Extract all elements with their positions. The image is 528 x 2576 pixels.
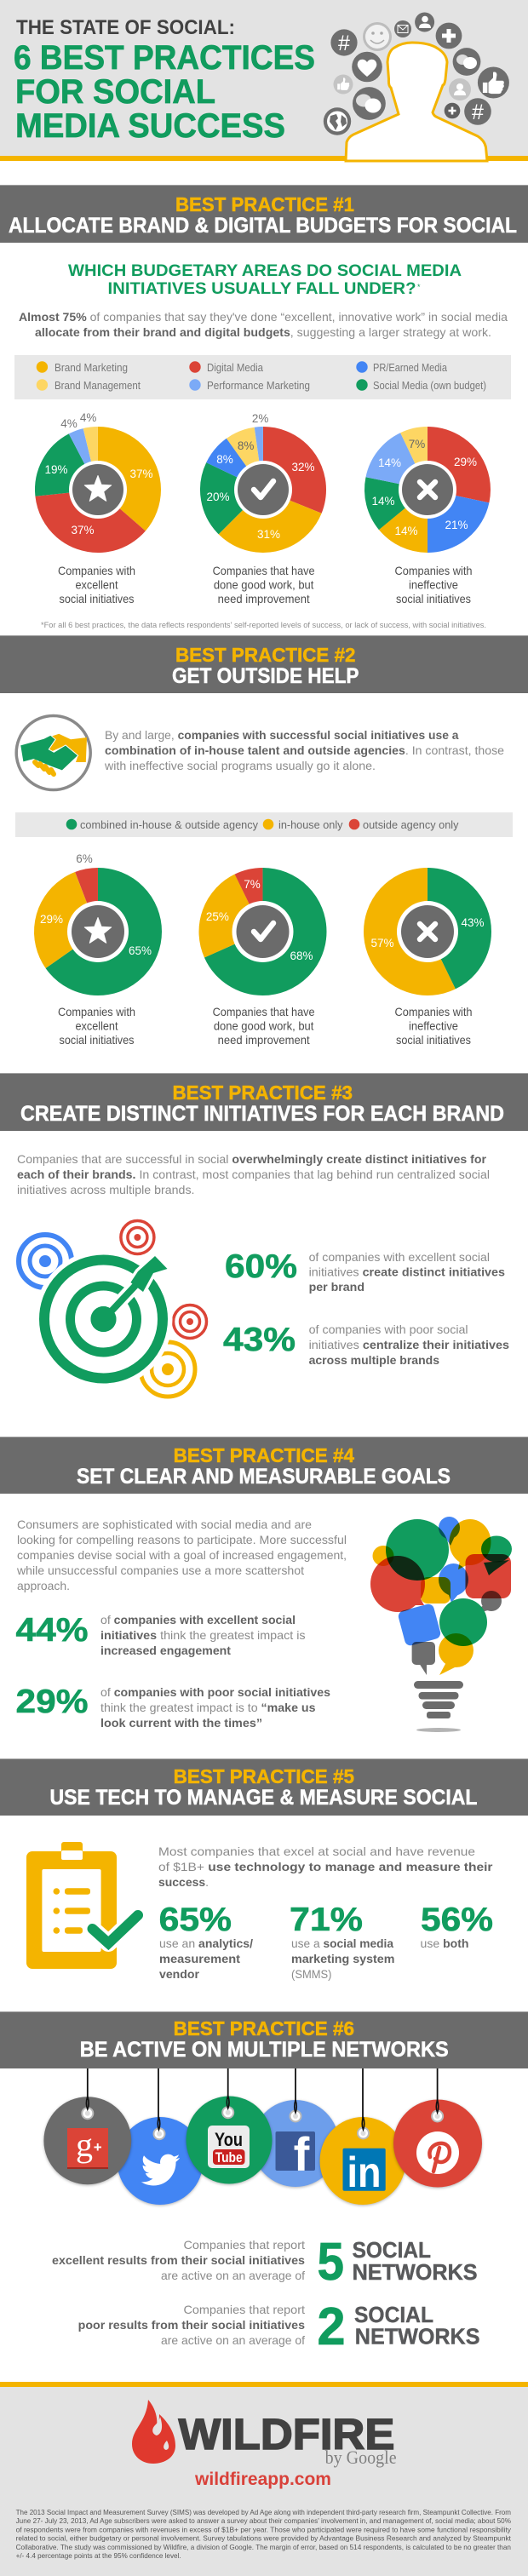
intro text: allocate from their brand and digital budgets, suggesting a larger strategy at work. — [35, 325, 491, 339]
stat: 44 percent: of companies with excellent social — [100, 1613, 296, 1626]
tag: google plus — [43, 2068, 131, 2184]
captions: agency pies: done good work, but — [214, 1018, 313, 1032]
icon: hash: # — [338, 32, 350, 55]
icon: light bulb of speech bubbles — [370, 1517, 512, 1732]
icon: handshake — [16, 715, 90, 790]
heading bar: best practice 5: BEST PRACTICE #5 — [174, 1765, 354, 1787]
pie chart: good work, budgets — [206, 412, 315, 541]
pie chart: ineffective, budgets: 7% — [409, 438, 425, 450]
intro text: outside help: By and large, companies with successful social initiatives use a — [105, 728, 459, 742]
tag: linkedin — [320, 2068, 405, 2205]
legend: budget areas: Digital Media — [207, 361, 264, 374]
methodology fine print: +/- 4.4 percentage points at the 95% confidence level. — [16, 2551, 181, 2560]
hanging tags: social networks — [43, 2068, 482, 2205]
icon: cross — [420, 482, 435, 497]
heading bar: best practice 4: SET CLEAR AND MEASURABLE GOALS — [77, 1465, 451, 1489]
pie chart: excellent, agency: 6% — [76, 852, 93, 865]
stat: 65 percent: measurement — [159, 1952, 240, 1965]
intro text: distinct initiatives: Companies that are successful in social overwhelmingly create distinct initiatives for — [17, 1152, 487, 1166]
stat: 2 social networks: NETWORKS — [355, 2323, 480, 2349]
pie chart: good work, budgets: 20% — [206, 491, 230, 503]
captions: budget pies — [58, 564, 472, 605]
pie chart: good work, agency: 25% — [206, 910, 229, 923]
captions: budget pies: Companies that have — [213, 564, 315, 577]
icon: person silhouette — [346, 43, 487, 161]
heading bar: best practice 4: BEST PRACTICE #4 — [174, 1444, 354, 1466]
captions: budget pies: social initiatives — [396, 592, 471, 605]
stat: 65 percent: 65% — [159, 1902, 232, 1938]
heading bar: best practice 1 — [0, 185, 528, 243]
stat: 43 percent: 43% — [223, 1322, 296, 1358]
pie chart: ineffective, budgets — [371, 438, 477, 537]
stat: 2 social networks: SOCIAL — [354, 2302, 433, 2327]
stat: 5 social networks — [52, 2233, 478, 2292]
pie chart: good work, budgets: 2% — [252, 412, 268, 425]
icon: star — [84, 918, 112, 943]
legend: agency: outside agency only — [363, 818, 459, 831]
heading bar: best practice 3 — [0, 1073, 528, 1131]
stat: 60 percent — [225, 1248, 505, 1294]
stat: 5 social networks: SOCIAL — [353, 2237, 431, 2263]
icon: plus — [436, 23, 462, 49]
stat: 60 percent: initiatives create distinct initiatives — [309, 1265, 505, 1279]
stat: 56 percent: 56% — [421, 1902, 493, 1938]
stat: 2 social networks: Companies that report — [184, 2303, 305, 2316]
pie chart: good work, budgets: 8% — [238, 439, 254, 452]
pie chart: excellent, budgets: 4% — [80, 411, 96, 424]
pie chart: excellent, budgets: 19% — [44, 463, 68, 476]
icon: star — [84, 475, 112, 501]
tag: twitter — [117, 2068, 204, 2205]
legend: budget areas: Social Media (own budget) — [373, 379, 486, 392]
captions: agency pies: excellent — [75, 1018, 118, 1032]
intro text: technology — [158, 1845, 493, 1889]
captions: budget pies: Companies with — [58, 564, 135, 577]
pie chart: excellent, budgets: 37% — [71, 524, 95, 536]
icon: check — [254, 481, 273, 497]
legend: budget areas — [14, 355, 511, 399]
stat: 43 percent: of companies with poor social — [309, 1322, 468, 1336]
captions: budget pies: excellent — [75, 577, 118, 591]
legend: budget areas: Brand Management — [55, 379, 141, 392]
stat: 44 percent: increased engagement — [100, 1644, 231, 1657]
heading bar: best practice 6: BE ACTIVE ON MULTIPLE NETWORKS — [80, 2038, 449, 2062]
intro text: goals: while unsuccessful companies use a more scattershot — [16, 1563, 304, 1577]
icon: thumbs up small — [334, 75, 353, 94]
stat: 29 percent: look current with the times” — [100, 1716, 262, 1730]
intro text: technology: Most companies that excel at social and have revenue — [158, 1845, 475, 1858]
stat: 71 percent — [290, 1902, 394, 1981]
captions: budget pies: need improvement — [218, 592, 310, 605]
heading bar: best practice 1: BEST PRACTICE #1 — [175, 193, 354, 215]
captions: agency pies: social initiatives — [60, 1033, 135, 1047]
stat: 43 percent: initiatives centralize their initiatives — [309, 1338, 509, 1351]
legend: agency: combined in-house & outside agency — [80, 818, 258, 831]
heading bar: best practice 5 — [0, 1758, 528, 1816]
stat: 71 percent: use a social media — [291, 1936, 393, 1950]
stat: 71 percent: (SMMS) — [291, 1967, 332, 1981]
stat: 5 social networks: excellent results from their social initiatives — [52, 2253, 305, 2267]
pie chart: good work, agency: 68% — [290, 950, 313, 962]
pie chart: good work, budgets: 31% — [257, 528, 280, 541]
heading bar: best practice 6: BEST PRACTICE #6 — [174, 2017, 354, 2040]
intro text: distinct initiatives: initiatives across multiple brands. — [17, 1183, 194, 1196]
pie chart: excellent, agency: 65% — [129, 944, 152, 957]
icon: smiley — [363, 22, 392, 51]
icon: person — [415, 12, 434, 32]
icon: clipboard with check — [26, 1842, 138, 1969]
stat: 56 percent: use both — [421, 1936, 468, 1950]
stat: 2 social networks: poor results from their social initiatives — [78, 2318, 305, 2332]
icon: globe — [324, 107, 351, 135]
heading bar: best practice 2 — [0, 635, 528, 693]
heading bar: best practice 2: GET OUTSIDE HELP — [172, 664, 359, 688]
tag: youtube — [186, 2068, 273, 2183]
logo: flame — [132, 2400, 175, 2464]
question heading: * — [417, 283, 421, 291]
methodology fine print: Collaborative. The study was commissioned by Wildfire, a division of Google. The margin of error, based on 514 respondents, is calculated to be no greater than — [16, 2543, 511, 2551]
stat: 2 social networks — [78, 2298, 479, 2356]
tag: google plus: + — [94, 2139, 102, 2155]
heading bar: best practice 3: BEST PRACTICE #3 — [172, 1081, 353, 1104]
tag: youtube: Tube — [215, 2149, 243, 2166]
captions: budget pies: Companies with — [395, 564, 472, 577]
stat: 71 percent: marketing system — [291, 1952, 394, 1965]
question heading: INITIATIVES USUALLY FALL UNDER? — [107, 279, 416, 298]
stat: 60 percent: 60% — [225, 1248, 297, 1285]
intro text — [19, 310, 508, 339]
intro text: distinct initiatives — [17, 1152, 490, 1196]
stat: 29 percent: think the greatest impact is to “make us — [100, 1701, 316, 1714]
icon: cross — [420, 924, 435, 939]
stat: 60 percent: per brand — [309, 1280, 364, 1294]
website url: wildfireapp.com — [194, 2469, 331, 2489]
icon: hash lower: # — [472, 100, 484, 124]
pie chart: good work, budgets: 32% — [291, 461, 315, 473]
tag: linkedin: in — [347, 2149, 382, 2196]
captions: budget pies: social initiatives — [60, 592, 135, 605]
intro text: outside help: with ineffective social programs usually go it alone. — [104, 759, 376, 772]
captions: agency pies: Companies that have — [213, 1005, 315, 1018]
captions: agency pies — [58, 1005, 472, 1047]
legend: budget areas: PR/Earned Media — [373, 361, 448, 374]
icon: check — [254, 923, 273, 939]
stat: 43 percent — [223, 1322, 509, 1367]
logo: wordmark: WILDFIRE — [179, 2410, 394, 2458]
icon: heart — [352, 52, 382, 82]
pie chart: good work, budgets: 8% — [216, 453, 233, 466]
tag: pinterest — [393, 2068, 482, 2187]
intro text: outside help — [104, 728, 504, 772]
legend: budget areas: Performance Marketing — [207, 379, 310, 392]
pie chart: good work, agency: 7% — [244, 878, 261, 891]
methodology fine print: of respondents were from companies with revenues in excess of $1B+ per year. Those who participated were required to have some functional responsibility — [16, 2525, 512, 2533]
stat: 65 percent: use an analytics/ — [159, 1936, 253, 1950]
question heading — [68, 261, 462, 298]
intro text: goals — [16, 1517, 347, 1592]
stat: 2 social networks: are active on an average of — [161, 2333, 305, 2347]
methodology fine print: June 27- July 23, 2013, Ad Age subscribers were asked to answer a survey about their companies' involvement in, and management of, social media; about 50% — [16, 2516, 511, 2525]
stat: 29 percent — [15, 1684, 330, 1730]
pie chart: ineffective, agency: 43% — [461, 916, 485, 929]
methodology fine print: related to social, either budgetary or personal involvement. Survey tabulations were provided by Advantage Business Research and analyzed by Steampunkt — [16, 2533, 512, 2542]
icon: bulb base — [414, 1681, 463, 1732]
stat: 29 percent: 29% — [15, 1684, 89, 1720]
heading bar: best practice 2: BEST PRACTICE #2 — [175, 644, 356, 666]
methodology fine print — [16, 2508, 512, 2560]
pie chart: excellent, agency — [40, 852, 152, 976]
icon: mail — [394, 20, 411, 37]
stat: 44 percent: 44% — [15, 1612, 89, 1649]
header panel — [0, 0, 528, 161]
pie chart: ineffective, budgets: 14% — [394, 525, 418, 537]
tag: youtube: You — [215, 2129, 243, 2150]
stat: 5 social networks: NETWORKS — [353, 2259, 478, 2285]
intro text: goals: companies devise social with a goal of increased engagement, — [17, 1548, 347, 1562]
captions: budget pies: done good work, but — [214, 577, 313, 591]
icon: chat — [453, 48, 480, 76]
stat: 65 percent: vendor — [159, 1967, 200, 1981]
captions: agency pies: social initiatives — [396, 1033, 471, 1047]
icon: hash — [330, 29, 358, 56]
heading bar: best practice 4 — [0, 1437, 528, 1494]
footnote: *For all 6 best practices, the data reflects respondents' self-reported levels of success, or lack of success, with social initiatives. — [41, 621, 486, 630]
logo: by Google: by Google — [325, 2447, 397, 2468]
pie chart: ineffective, budgets: 14% — [371, 495, 395, 508]
pie chart: excellent, agency: 29% — [40, 913, 63, 926]
tag: google plus: g — [76, 2126, 93, 2164]
pie chart: good work, agency — [206, 878, 313, 974]
captions: agency pies: Companies with — [58, 1005, 135, 1018]
heading bar: best practice 3: CREATE DISTINCT INITIATIVES FOR EACH BRAND — [20, 1102, 504, 1126]
icon: chat large — [353, 87, 386, 120]
captions: agency pies: ineffective — [409, 1018, 458, 1032]
legend: agency — [15, 812, 513, 837]
stat: 5 social networks: Companies that report — [184, 2238, 305, 2252]
main title: MEDIA SUCCESS — [15, 107, 285, 145]
legend: agency: in-house only — [278, 818, 343, 831]
icon: person light — [449, 78, 471, 100]
pie chart: ineffective, budgets: 14% — [378, 456, 401, 469]
stat: 65 percent — [159, 1902, 253, 1981]
stat: 44 percent — [15, 1612, 306, 1657]
title kicker: THE STATE OF SOCIAL: — [16, 16, 235, 39]
main title: FOR SOCIAL — [15, 73, 215, 111]
intro text: distinct initiatives: each of their brands. In contrast, most companies that lag behind run centralized social — [17, 1168, 490, 1181]
intro text: technology: of $1B+ use technology to manage and measure their — [158, 1860, 493, 1873]
question heading: WHICH BUDGETARY AREAS DO SOCIAL MEDIA — [68, 261, 462, 280]
icon: targets with arrow — [19, 1221, 206, 1397]
pie chart: excellent, budgets: 4% — [60, 417, 77, 430]
stat: 44 percent: initiatives think the greatest impact is — [100, 1628, 306, 1642]
stat: 5 social networks: 5 — [317, 2233, 344, 2292]
heading bar: best practice 5: USE TECH TO MANAGE & MEASURE SOCIAL — [49, 1786, 477, 1810]
stat: 43 percent: across multiple brands — [309, 1353, 439, 1367]
pie chart: excellent, budgets: 37% — [129, 468, 153, 480]
intro text: goals: looking for compelling reasons to participate. More successful — [17, 1533, 347, 1546]
captions: budget pies: ineffective — [409, 577, 458, 591]
eyelets and string loops — [81, 2096, 444, 2140]
tag: facebook: f — [294, 2127, 310, 2181]
tag: facebook — [252, 2068, 339, 2187]
pie chart: ineffective, agency: 57% — [370, 937, 394, 950]
heading bar: best practice 6 — [0, 2011, 528, 2068]
stat: 5 social networks: are active on an average of — [161, 2269, 305, 2282]
intro text: goals: approach. — [17, 1579, 70, 1592]
captions: agency pies: Companies with — [395, 1005, 472, 1018]
stat: 2 social networks: 2 — [317, 2298, 346, 2356]
stat: 71 percent: 71% — [290, 1902, 363, 1938]
main title — [14, 39, 315, 145]
icon: thumbs up large — [478, 66, 509, 99]
intro text: outside help: combination of in-house talent and outside agencies. In contrast, those — [105, 743, 504, 757]
captions: agency pies: need improvement — [218, 1033, 310, 1047]
main title: 6 BEST PRACTICES — [14, 39, 315, 77]
intro text: technology: success. — [158, 1875, 209, 1889]
pie chart: ineffective, budgets: 21% — [445, 519, 468, 531]
icon: small plus — [445, 103, 460, 118]
legend: budget areas: Brand Marketing — [55, 361, 128, 374]
pie chart: ineffective, budgets: 29% — [454, 456, 477, 468]
stat: 29 percent: of companies with poor social initiatives — [100, 1685, 330, 1699]
intro text: goals: Consumers are sophisticated with social media and are — [17, 1517, 312, 1531]
stat: 60 percent: of companies with excellent social — [309, 1250, 490, 1264]
pie chart: ineffective, agency — [370, 889, 485, 974]
pie chart: excellent, budgets — [44, 411, 153, 536]
stat: 56 percent — [421, 1902, 493, 1950]
intro text: Almost 75% of companies that say they've done “excellent, innovative work” in social media — [19, 310, 508, 324]
icon: hash lower — [464, 98, 491, 125]
footer panel — [0, 2382, 528, 2576]
